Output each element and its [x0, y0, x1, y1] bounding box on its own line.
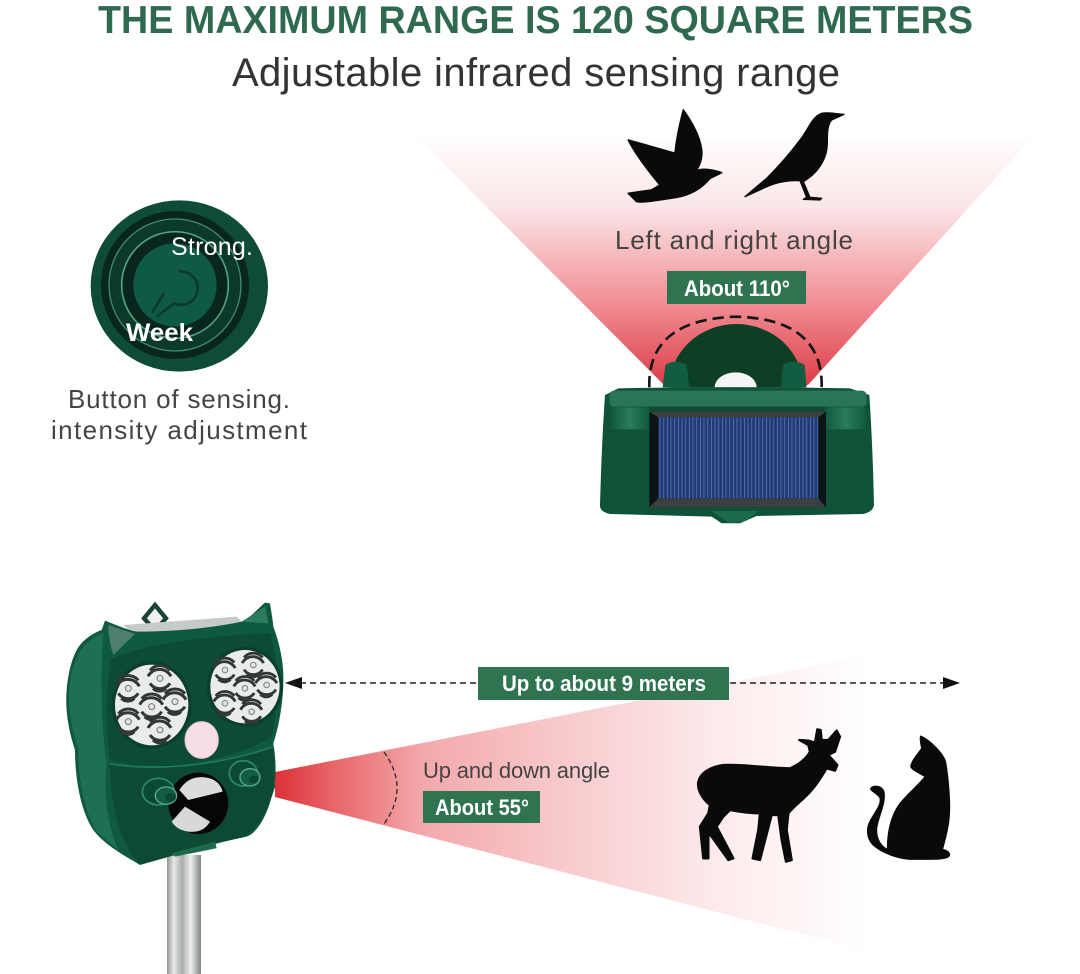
knob outer ring	[101, 211, 249, 359]
frame bottom bevel	[649, 498, 826, 507]
badge: up to about 9 meters	[478, 667, 729, 700]
knob inner dial	[133, 243, 217, 327]
owl body	[66, 603, 283, 865]
knob label: week: Week	[126, 319, 193, 347]
top highlight	[609, 391, 867, 407]
knob label: strong: Strong.	[171, 233, 253, 261]
right shoulder	[825, 407, 867, 429]
knob middle ring	[122, 232, 228, 338]
infrared sensor nose	[185, 722, 218, 758]
device: owl-shaped repeller	[66, 603, 283, 865]
lower red sensing beam	[275, 655, 870, 952]
icon: cat silhouette	[867, 736, 950, 859]
subtitle: Adjustable infrared sensing range	[232, 51, 840, 95]
right ear inner	[242, 607, 268, 623]
right knob	[781, 362, 807, 387]
bottom clip	[712, 511, 758, 523]
label: left and right angle: Left and right angle	[615, 225, 853, 255]
left shoulder	[611, 407, 649, 429]
hanging loop	[144, 605, 166, 631]
badge: about 55 degrees: About 55°	[435, 795, 529, 820]
title: THE MAXIMUM RANGE IS 120 SQUARE METERS	[98, 0, 973, 42]
knob caption: Button of sensing.	[68, 384, 290, 414]
icon: perched crow	[745, 113, 844, 200]
solar cells	[658, 417, 818, 498]
knob outer disc	[91, 200, 268, 372]
icon: deer silhouette	[698, 729, 840, 862]
green half-disc	[669, 324, 803, 387]
badge: up to about 9 meters: Up to about 9 meters	[502, 671, 706, 696]
dashed angle arc	[384, 752, 397, 824]
rim band	[647, 407, 830, 411]
dashed range arc	[649, 317, 822, 387]
left knob	[142, 778, 177, 805]
badge: about 55 degrees	[423, 791, 540, 823]
dashed distance arrow	[285, 677, 960, 689]
solar frame	[649, 412, 826, 507]
badge: about 110 degrees: About 110°	[684, 276, 790, 301]
face panel	[106, 633, 277, 766]
pole	[167, 855, 201, 974]
device: solar panel rear view	[600, 317, 874, 523]
knob pointer	[152, 272, 198, 317]
right eye LEDs	[207, 647, 283, 727]
left knob	[663, 362, 689, 387]
lower face highlight	[110, 747, 273, 767]
sensing knob photo	[91, 200, 268, 372]
knob caption: intensity adjustment	[51, 415, 308, 445]
right knob	[229, 761, 260, 786]
label: up and down angle: Up and down angle	[423, 758, 610, 783]
highlight ring	[109, 219, 241, 351]
frame top bevel	[649, 412, 826, 417]
left ear inner	[108, 625, 135, 655]
device body	[600, 387, 874, 523]
bottom bracket	[172, 842, 217, 857]
icon: flying bird	[628, 110, 722, 202]
left side shading	[69, 633, 118, 850]
top solar strip	[123, 617, 247, 635]
lower shadow	[110, 747, 275, 864]
ultrasonic speaker	[168, 773, 228, 834]
left eye LEDs	[112, 661, 192, 749]
sensor window	[714, 372, 758, 405]
badge: about 110 degrees	[667, 271, 806, 304]
top red sensing beam	[415, 135, 1030, 385]
knob caption	[51, 384, 308, 445]
